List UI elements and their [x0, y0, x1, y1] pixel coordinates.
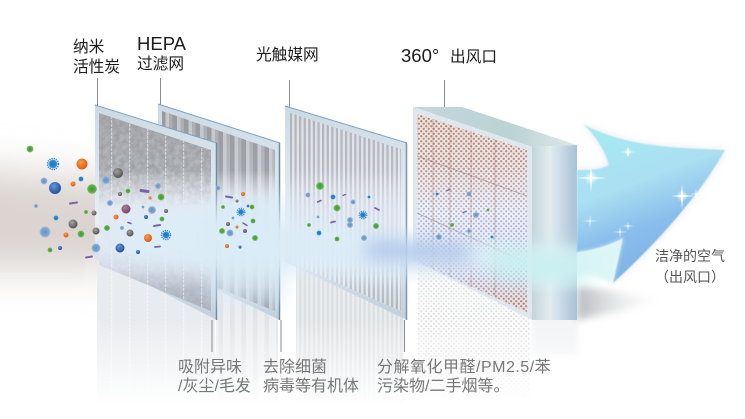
incoming dirty air haze	[0, 165, 200, 270]
heading: HEPA filter: 过滤网	[137, 55, 184, 73]
panel: HEPA filter	[158, 104, 280, 320]
caption: photocatalyst effect: 污染物/二手烟等。	[377, 377, 509, 395]
particles: incoming air	[26, 146, 123, 258]
panel: photocatalyst filter	[285, 106, 407, 320]
sparkles	[575, 146, 726, 238]
caption: carbon filter effect: /灰尘/毛发	[178, 377, 251, 395]
caption: HEPA filter effect: 去除细菌	[263, 358, 327, 376]
particles: on HEPA filter	[216, 186, 258, 248]
heading: nano activated carbon: 纳米	[73, 38, 105, 56]
caption: HEPA filter effect: 病毒等有机体	[263, 377, 359, 395]
label: clean air from outlet: 洁净的空气	[655, 248, 725, 264]
caption: carbon filter effect: 吸附异味	[178, 358, 242, 376]
air stream	[125, 195, 590, 300]
particles: on outlet filter	[436, 190, 494, 240]
heading: 360 degree outlet: 360°	[401, 45, 439, 66]
lead lines	[98, 78, 444, 108]
heading: 360 degree outlet: 出风口	[450, 48, 497, 66]
label: clean air from outlet: （出风口）	[655, 269, 725, 285]
particles: on carbon filter	[104, 183, 170, 254]
panel: 360 degree outlet filter	[413, 107, 577, 320]
floor shadow	[577, 286, 672, 320]
particles: on photocatalyst filter	[306, 182, 379, 242]
clean air arrow	[575, 124, 726, 283]
bottom lead lines	[212, 320, 404, 352]
heading: photocatalyst filter: 光触媒网	[256, 46, 319, 64]
heading: HEPA filter: HEPA	[137, 33, 187, 54]
heading: nano activated carbon: 活性炭	[73, 58, 120, 76]
reflections on floor	[85, 255, 595, 419]
panel: nano activated carbon filter	[95, 105, 217, 320]
caption: photocatalyst effect: 分解氧化甲醛/PM2.5/苯	[377, 358, 551, 376]
